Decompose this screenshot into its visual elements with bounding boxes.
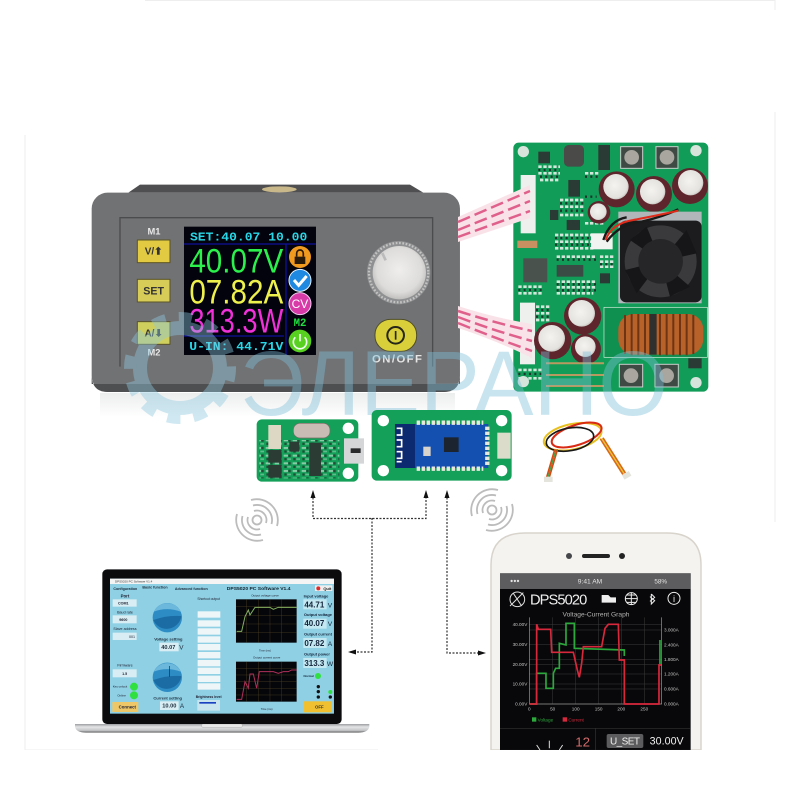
graph legend [532,717,585,722]
surface components [517,145,702,368]
power circuit board [513,143,708,392]
icon: lock [289,246,311,268]
quit button: Quit [323,586,332,591]
time axis: 250 [640,707,649,712]
current setting: Current setting [153,695,182,700]
fan wires [603,209,678,242]
button: V up [137,240,170,263]
voltage axis: 40.00V [513,622,528,627]
icon: power [289,330,311,352]
off button [304,701,332,712]
configuration column: Baud rate [117,610,133,614]
arrowheads [444,490,486,656]
white cut below frame [0,750,800,800]
voltage axis: 30.00V [513,642,528,647]
current chart: Time (ms) [261,707,273,711]
current setting: A [180,703,185,710]
time axis: 50 [550,707,556,712]
voltage axis: 10.00V [513,682,528,687]
output readouts: Output current [304,631,333,636]
surface component rows: dark [518,170,614,374]
arrowheads [310,490,428,654]
voltage setting [154,637,184,651]
current chart: Output current curve [253,656,281,660]
label: M2 on screen: M2 [294,318,306,330]
icon: check [289,269,311,291]
status lights [315,673,332,699]
current dial [153,663,182,692]
configuration column: Slave address [113,627,137,631]
trackpad notch [202,724,242,727]
bottom panels [500,728,691,750]
brightness control: Brightness level [196,695,222,699]
U_SET readout [607,734,685,748]
time axis: 150 [595,707,603,712]
button: A down: A/⬇ [144,329,163,340]
ribbon cable: upper [458,185,530,242]
software window [110,579,334,714]
white connector [497,433,511,459]
voltage-current graph [513,612,680,722]
phone screen [500,573,691,750]
app logo [510,592,525,607]
back housing [128,185,423,193]
output readouts: A [328,641,333,648]
software window: DPS5020 PC Software V1.4 [115,579,153,583]
dotted connector: laptop to modules [310,490,428,654]
output readouts: 313.3 [304,659,325,668]
output readouts: V [328,621,333,628]
voltage chart [236,593,297,652]
laptop base [75,724,369,733]
current axis: 1.200A [664,672,680,677]
voltage axis: 20.00V [513,662,528,667]
status bar: 9:41 AM [578,578,602,585]
crystal [293,423,330,438]
rotary knob [367,241,430,304]
status bar [500,573,691,589]
data group buttons [198,611,220,690]
voltage setting: V [179,644,184,651]
phone speaker and camera [566,553,625,559]
app toolbar icons: i [673,594,675,604]
ribbon cable: lower [458,306,532,358]
gauge value: 12 [575,735,590,750]
output readouts: Output voltage [304,612,333,617]
voltage axis [513,622,528,707]
tabs: Advanced function [175,587,208,591]
voltage axis: 0.00V [515,702,528,707]
current axis [664,628,680,706]
configuration column: Key unlock [113,685,128,689]
cooling fan [620,221,702,302]
watermark [130,318,668,435]
output readouts: Normal [303,674,314,678]
voltage setting: 40.07 [161,645,175,651]
time axis: 100 [572,707,580,712]
current line [529,624,662,704]
current setting [153,695,185,710]
off button: OFF [315,704,324,709]
watermark gear [130,318,230,418]
current setting: 10.00 [162,704,176,710]
current axis: 1.800A [664,657,680,662]
button: SET: SET [143,286,165,298]
output readouts [303,593,334,678]
configuration column: 1.5 [122,672,127,676]
U_SET readout: U_SET [610,737,640,748]
configuration column: Online [117,694,126,698]
software title: DPS5020 PC Software V1.4 [227,586,291,592]
housing body [92,193,460,392]
configuration column: 001 [129,635,135,639]
dotted connector: phone to Bluetooth [444,490,486,656]
on/off button [375,319,417,351]
output readouts: Input voltage [304,593,329,598]
capacitors bottom [534,297,601,364]
power supply front panel [92,185,460,392]
current axis: 2.400A [664,642,680,647]
phone body [491,533,701,750]
toroid inductor [604,307,707,357]
wireless icon: right [471,489,513,531]
button: V up: V/⬆ [145,247,163,258]
laptop [75,569,369,733]
USB socket [344,438,364,464]
readout: power: 313.3W [189,303,284,341]
configuration column [112,593,138,712]
button: SET [137,279,170,302]
white connector [268,425,281,449]
inductor small [564,145,584,167]
voltage chart: Output voltage curve [251,593,279,597]
label: M2: M2 [148,347,160,357]
button: A down [137,322,170,344]
label: on/off: ON/OFF [372,354,422,366]
output readouts: 07.82 [304,639,325,648]
configuration column: Port [121,593,130,598]
current axis: 0.000A [664,701,680,706]
resistors leads [546,363,604,386]
current axis: 3.000A [664,628,680,633]
status bar: 58% [654,578,667,585]
MCU [444,437,459,452]
output readouts: Output power [304,651,330,656]
tabs [113,586,208,591]
component field [259,440,339,478]
configuration column: Connect [119,704,137,709]
status bar: ●●● [510,579,520,585]
output readouts: V [328,603,333,610]
voltage chart: Time (ms) [259,648,271,652]
time axis [528,707,649,712]
wireless icon: left [236,499,278,541]
brightness control [196,695,222,711]
label: M1: M1 [148,226,160,236]
USB communication module [257,419,364,482]
app toolbar icons [602,592,680,605]
graph legend: Voltage [538,717,554,722]
configuration column: COM1 [118,602,129,606]
output readouts: 40.07 [304,619,325,628]
readout: current: 07.82A [189,273,284,311]
configuration column: 9600 [119,618,127,622]
antenna trace [397,428,402,462]
voltage-current graph: Voltage-Current Graph [563,612,630,619]
U_SET readout: 30.00V [650,735,685,747]
watermark text: ЭЛЕРАНО [240,333,668,435]
graph legend: Current [568,717,585,722]
screw terminals [619,147,678,387]
capacitors top [588,168,708,224]
time axis: 200 [617,707,626,712]
quit button [315,585,332,591]
voltage line [530,623,660,704]
gauge value [537,735,590,750]
fan heatsink [618,212,702,303]
smartphone [491,533,701,750]
colour display [184,227,316,355]
voltage dial [153,603,182,632]
readout: set values: SET:40.07 10.00 [190,231,307,245]
blue radio board [395,424,488,468]
pads [417,423,487,469]
tabs: Configuration [113,587,137,591]
connector cable [541,417,631,482]
voltage setting: Voltage setting [154,637,183,642]
Bluetooth module [372,410,512,481]
time axis: 0 [528,707,531,712]
output readouts: W [327,661,334,668]
readout: input voltage: U-IN: 44.71V [189,340,283,354]
readout: voltage: 40.07V [189,243,283,281]
output readouts: 44.71 [304,601,325,610]
surface component rows: light [518,167,614,378]
icon: CV: CV [292,297,308,311]
connectors [521,175,536,233]
tabs: Basic function [142,586,168,590]
shortcut label: Shortcut output [197,597,220,601]
board [513,143,708,392]
current axis: 0.600A [664,687,680,692]
device floor reflection [100,393,455,417]
configuration column: Firmware [117,664,133,668]
chips [268,442,321,478]
current chart [236,656,297,711]
laptop bezel [102,569,342,724]
app title: DPS5020 [530,593,587,609]
